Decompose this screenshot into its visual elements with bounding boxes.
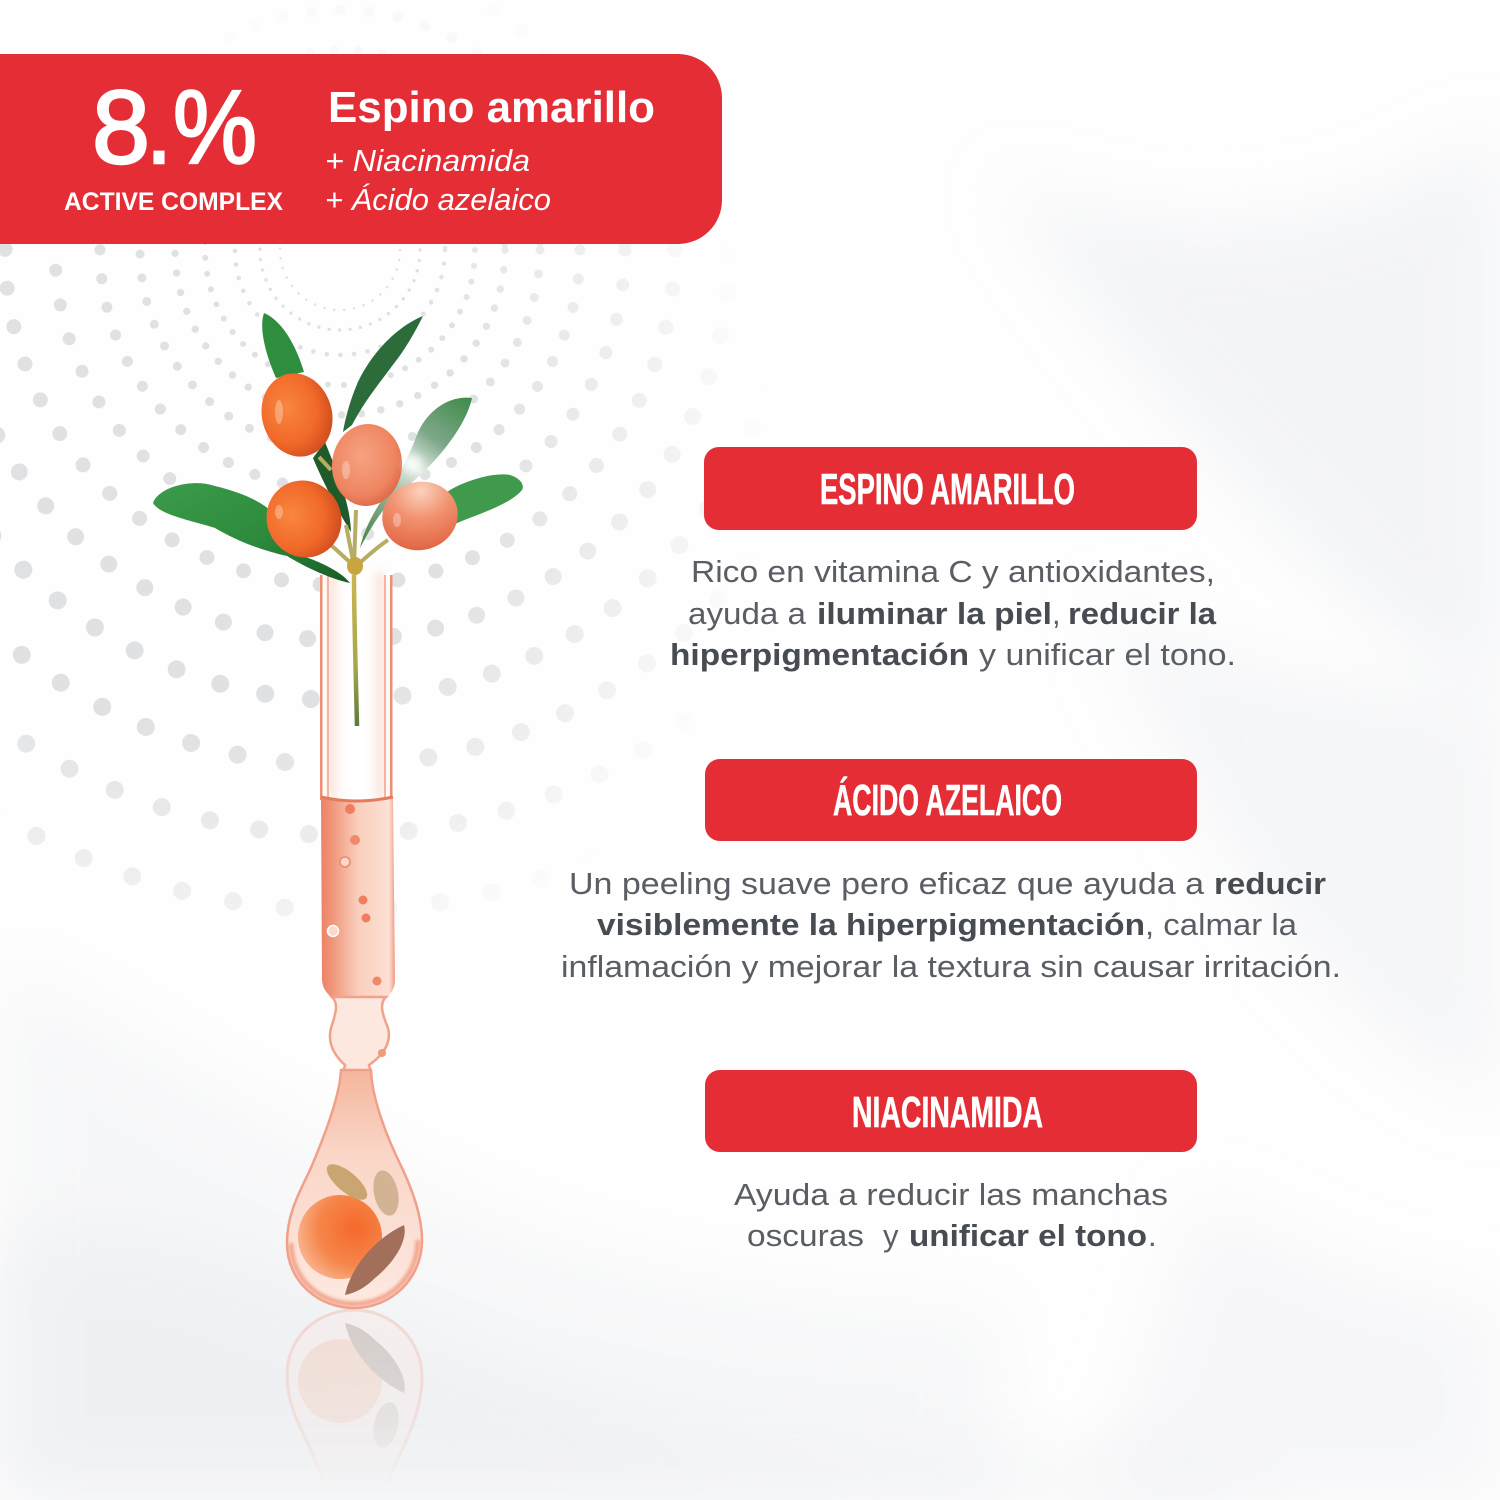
description: y (883, 1218, 899, 1253)
banner: active complex (0, 54, 722, 244)
leaf: top left (262, 313, 304, 378)
top strip dot fade (0, 0, 720, 56)
berry lower left (252, 467, 356, 571)
description: , (1052, 596, 1061, 631)
description (670, 554, 1236, 672)
berry highlights (275, 400, 401, 527)
description: oscuras (747, 1218, 864, 1253)
leaf: left (153, 483, 350, 583)
sparkle (404, 455, 422, 473)
main ingredient: Espino amarillo (328, 83, 655, 132)
description (561, 866, 1341, 984)
heading pill (705, 1070, 1197, 1152)
berry stems (319, 457, 388, 566)
big percentage (92, 70, 257, 186)
big percentage: . (146, 70, 172, 186)
description: visiblemente la hiperpigmentación (597, 907, 1145, 942)
description: iluminar la piel (817, 596, 1052, 631)
drop reflection (286, 1309, 424, 1466)
description: reducir (1214, 866, 1326, 901)
halftone dot pattern (0, 244, 700, 916)
secondary ingredients: + Niacinamida (325, 143, 530, 178)
panel: niacinamida (705, 1070, 1197, 1253)
dropper tube, empty part (320, 572, 392, 800)
seed top (321, 1158, 373, 1206)
description: ayuda a (688, 596, 807, 631)
heading pill: ESPINO AMARILLO (820, 465, 1075, 514)
description (734, 1177, 1168, 1253)
big percentage: 8 (92, 70, 150, 186)
heading pill (705, 759, 1197, 841)
heading pill: ÁCIDO AZELAICO (833, 775, 1062, 825)
orange inside drop (298, 1195, 382, 1279)
seed bottom (345, 1225, 405, 1295)
illustration: dropper with plant (153, 313, 523, 1500)
active complex label: ACTIVE COMPLEX (64, 188, 283, 216)
leaf: faded (360, 398, 472, 548)
description: , calmar la (1145, 907, 1298, 942)
description: hiperpigmentación (670, 637, 969, 672)
heading pill (704, 447, 1197, 530)
description: y unificar el tono. (979, 637, 1236, 672)
berry top left (252, 365, 342, 465)
leaf: long dark (343, 316, 423, 432)
description: reducir la (1068, 596, 1217, 631)
dropper liquid (321, 797, 395, 1072)
description: inflamación y mejorar la textura sin causar irritación. (561, 949, 1341, 984)
banner background (0, 54, 722, 244)
description: Ayuda a reducir las manchas (734, 1177, 1168, 1212)
description: Rico en vitamina C y antioxidantes, (691, 554, 1215, 589)
panel: acido azelaico (561, 759, 1341, 984)
description: . (1148, 1218, 1157, 1253)
secondary ingredients: + Ácido azelaico (325, 182, 551, 217)
berry right (374, 473, 466, 559)
plant stem (354, 575, 357, 726)
secondary ingredients (325, 143, 551, 217)
leaf: right (447, 474, 523, 524)
drop (287, 1070, 422, 1308)
description: unificar el tono (909, 1218, 1147, 1253)
panel: espino amarillo (670, 447, 1236, 672)
heading pill: NIACINAMIDA (852, 1088, 1043, 1137)
big percentage: % (173, 70, 257, 186)
berry centre (329, 421, 405, 509)
description: Un peeling suave pero eficaz que ayuda a (569, 866, 1205, 901)
stem knot (347, 557, 363, 575)
leaf: behind berries (313, 442, 351, 532)
seed right (369, 1168, 403, 1218)
